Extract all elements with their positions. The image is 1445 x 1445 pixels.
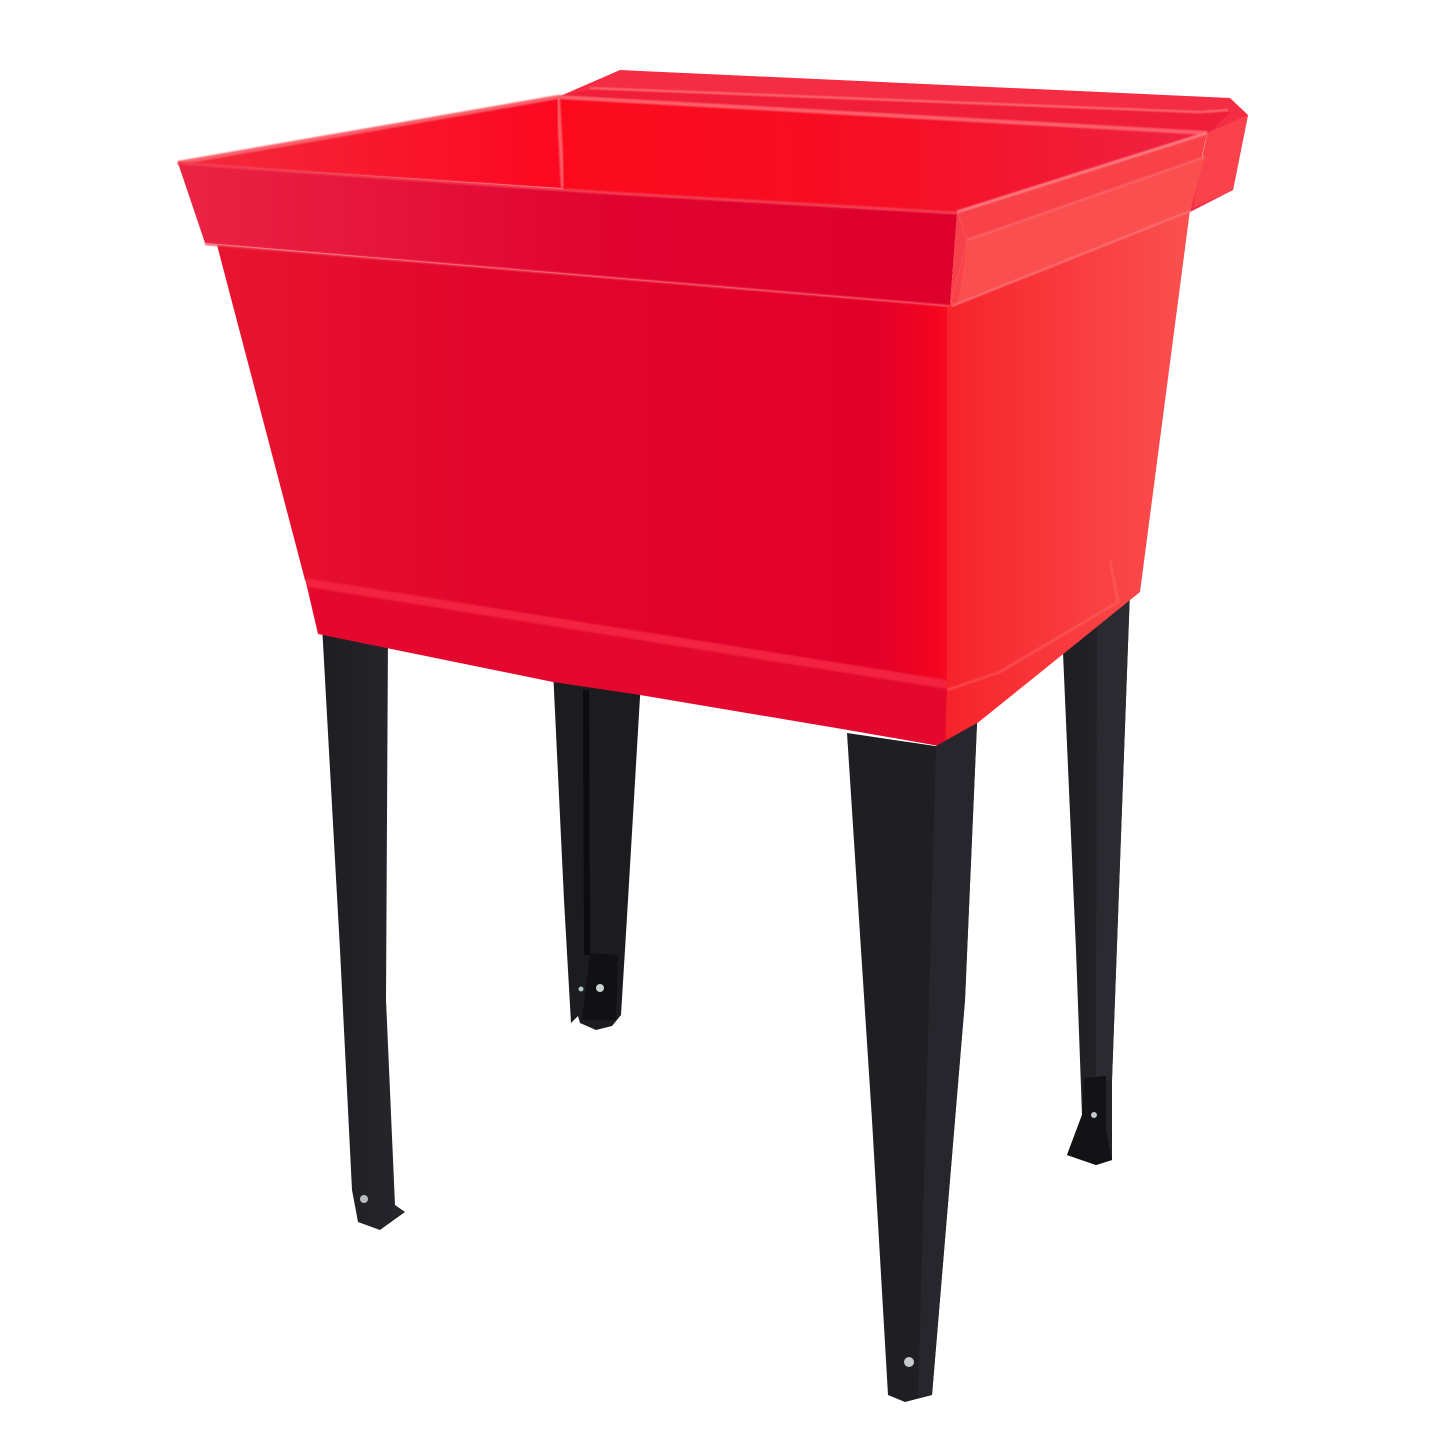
back-right leg — [1062, 590, 1130, 1165]
tub front lower band — [305, 578, 947, 747]
tub front wall — [217, 245, 947, 690]
front leg — [847, 723, 977, 1402]
tub front rim band — [178, 163, 957, 306]
rear shelf / splash rim — [558, 70, 1248, 212]
tub right side wall — [945, 210, 1190, 747]
front-left leg — [322, 625, 405, 1230]
tub interior — [178, 97, 1207, 214]
tub right rim band — [950, 133, 1207, 306]
back-left leg — [553, 670, 641, 1030]
